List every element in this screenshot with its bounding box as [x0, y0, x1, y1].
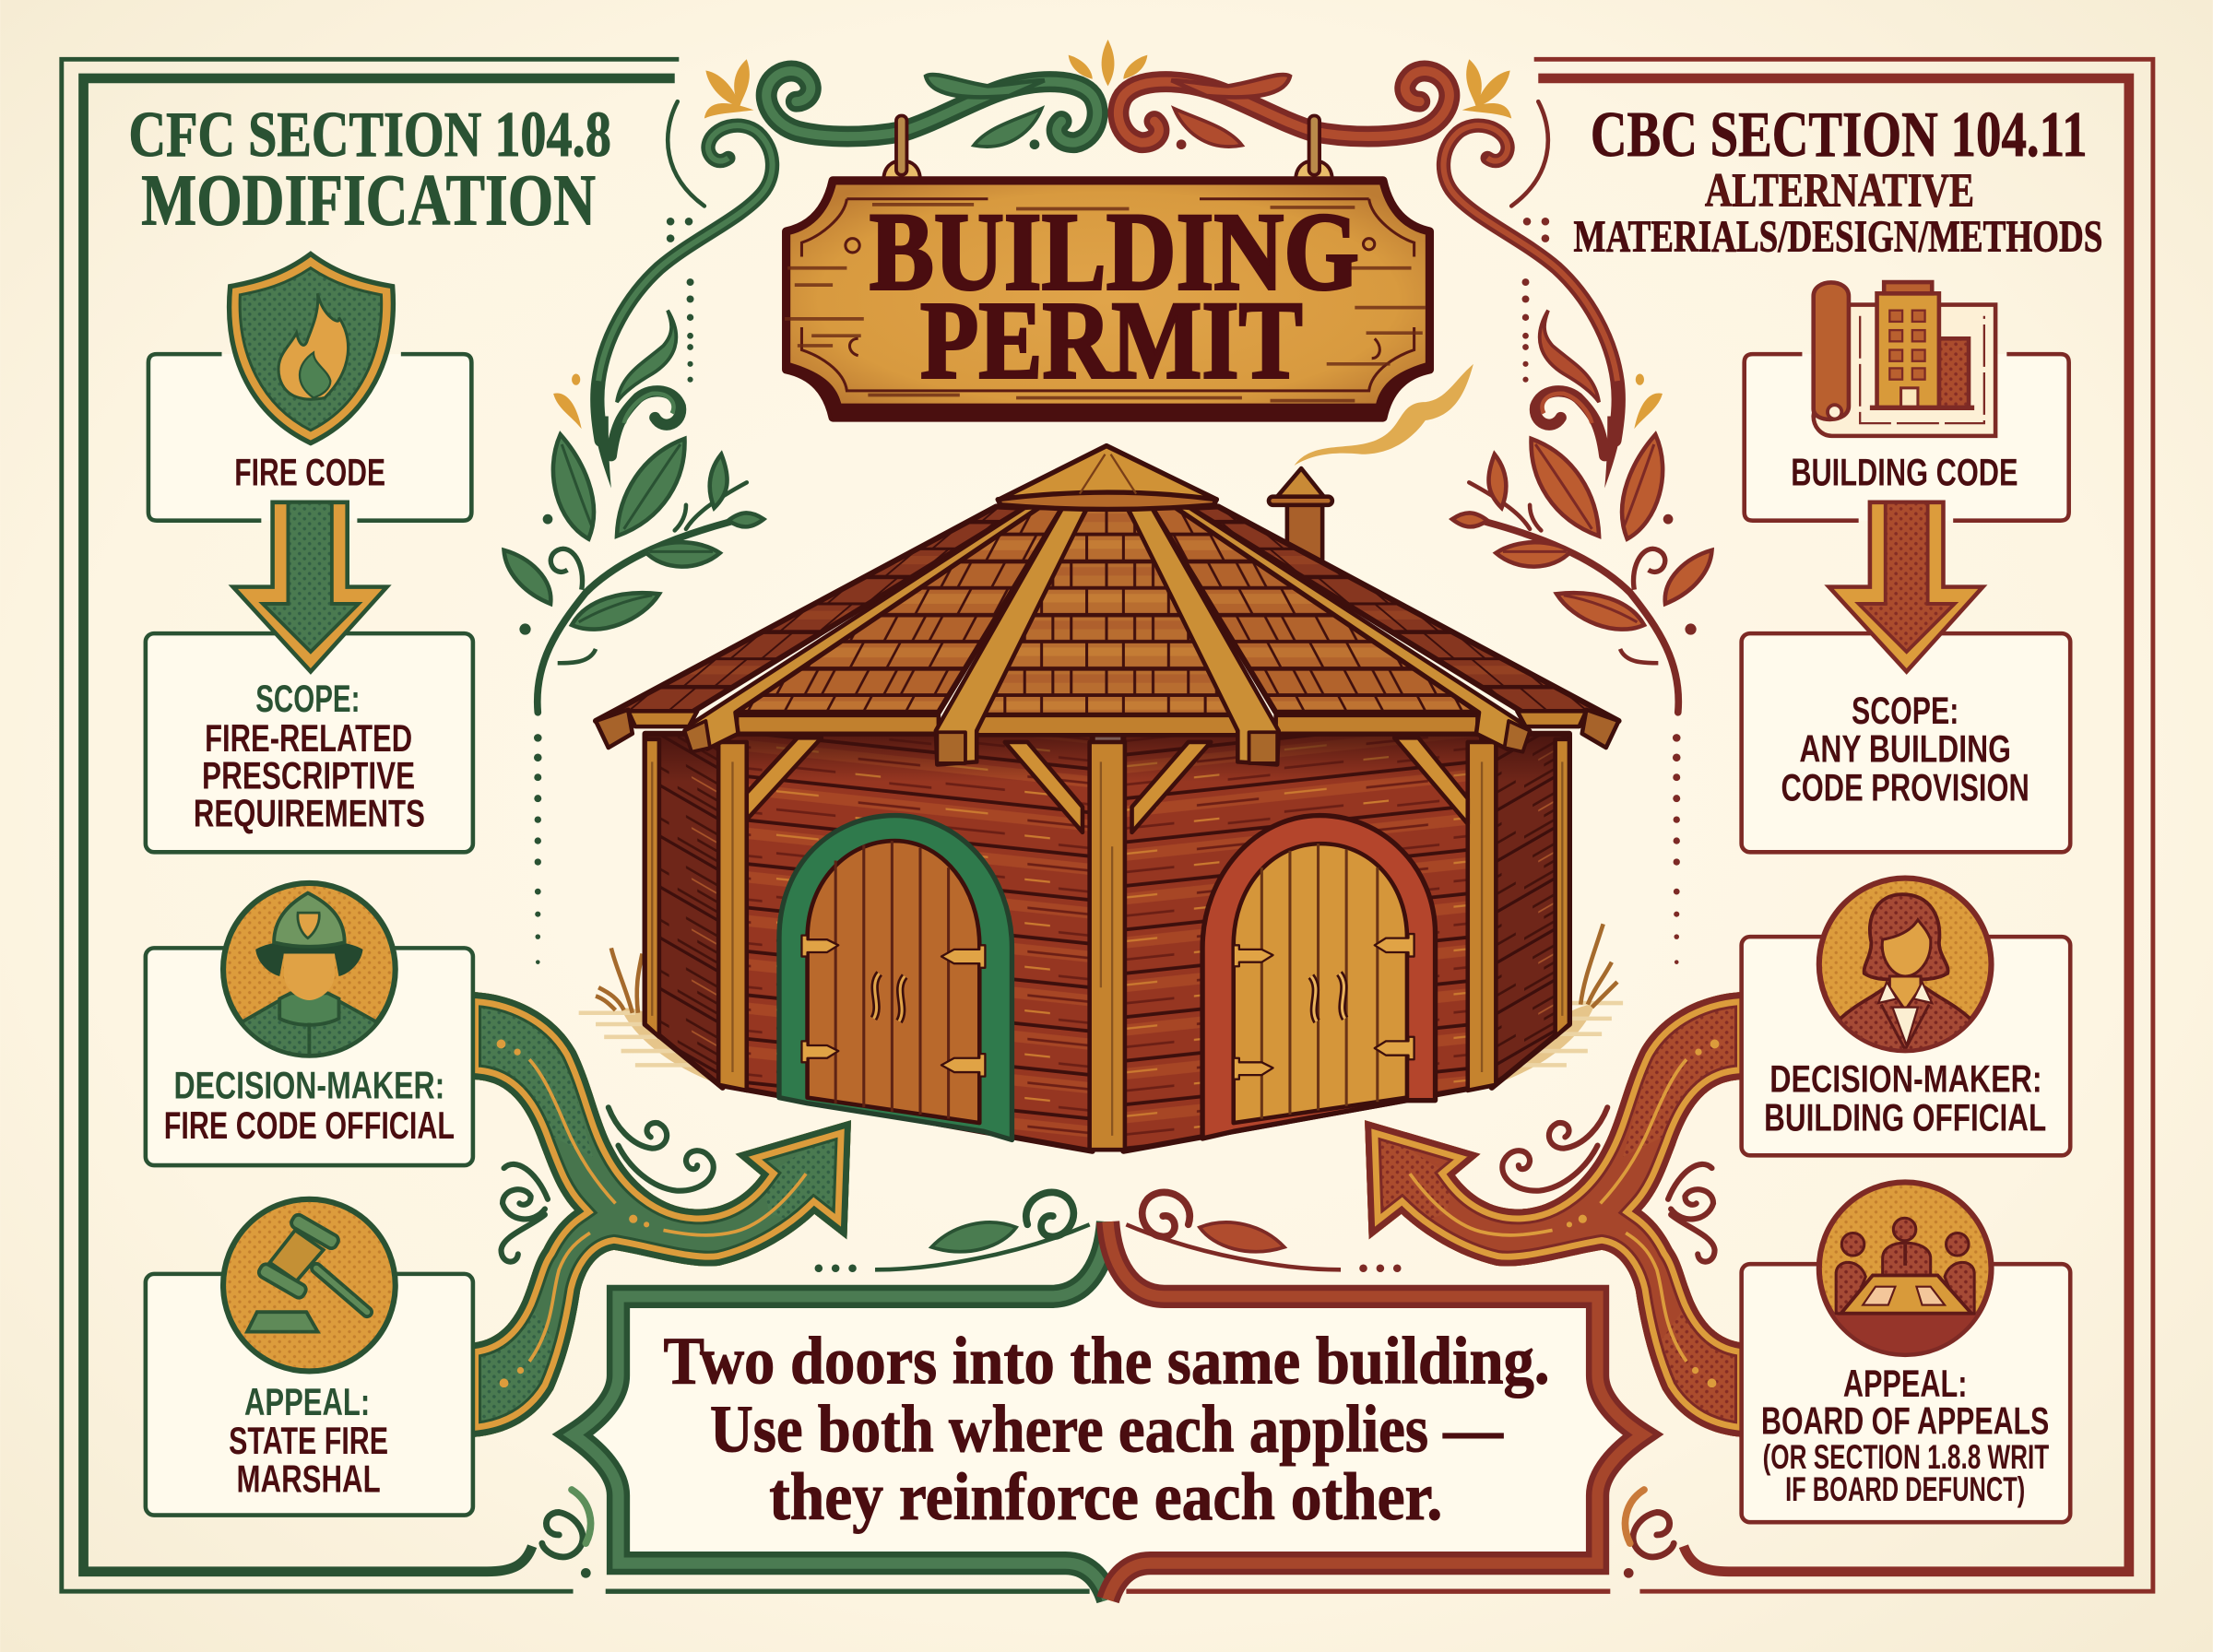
left heading [128, 99, 611, 241]
left box labels: DECISION-MAKER: [173, 1064, 444, 1106]
right box labels: SCOPE: [1852, 690, 1959, 732]
post grain [652, 761, 1562, 1136]
house [596, 446, 1619, 1151]
left box labels: STATE FIRE [229, 1420, 388, 1462]
front wall left [727, 734, 1093, 1151]
sign title [870, 191, 1359, 402]
green half of frame [574, 1221, 1108, 1599]
braces [747, 738, 1468, 832]
bottom curl left [542, 1490, 591, 1578]
left box labels: APPEAL: [244, 1381, 370, 1423]
left frame: green double border [62, 59, 1090, 1591]
rafter ends [684, 721, 1530, 763]
icon: fire shield [230, 254, 393, 443]
chimney [1269, 468, 1332, 563]
left heading: CFC SECTION 104.8 [128, 99, 611, 171]
left box labels: FIRE CODE OFFICIAL [164, 1104, 455, 1147]
building code box [1745, 354, 2069, 521]
red door [1202, 816, 1436, 1139]
decision-maker box [146, 948, 473, 1165]
callout text [663, 1323, 1550, 1534]
right vine with leaves [1443, 101, 1712, 713]
left box labels: PRESCRIPTIVE [202, 754, 415, 796]
right box labels: BOARD OF APPEALS [1761, 1400, 2049, 1443]
right boxes [1742, 354, 2070, 1522]
callout text: Use both where each applies — [710, 1392, 1504, 1467]
scope box [146, 633, 473, 852]
hanger straps [883, 115, 1332, 181]
left box labels: FIRE CODE [234, 451, 385, 493]
icon: woman official [1819, 879, 1992, 1072]
posts [645, 739, 1569, 1150]
roof cap [998, 446, 1216, 509]
rafters [684, 505, 1530, 764]
icon: firefighter [223, 883, 396, 1072]
left box labels: SCOPE: [255, 678, 360, 720]
green door [779, 816, 1012, 1139]
bottom curl right [1624, 1490, 1674, 1578]
appeal box [146, 1274, 473, 1516]
right box labels: DECISION-MAKER: [1769, 1057, 2042, 1100]
left arrow: merges decision-maker and appeal to green door [466, 992, 851, 1437]
right box labels [1761, 451, 2050, 1508]
icon: blueprint and building [1814, 282, 1995, 436]
callout top ornaments: green [815, 1192, 1090, 1272]
sign title: PERMIT [920, 278, 1303, 402]
right box labels: BUILDING OFFICIAL [1764, 1097, 2046, 1139]
right box labels: (OR SECTION 1.8.8 WRIT [1763, 1438, 2050, 1476]
callout text: they reinforce each other. [769, 1459, 1442, 1534]
right box labels: APPEAL: [1843, 1363, 1967, 1405]
down arrow green [233, 502, 387, 671]
flourishes near green arrow [501, 1107, 714, 1262]
icon: gavel [223, 1199, 396, 1371]
left box labels: REQUIREMENTS [194, 793, 425, 835]
callout text: Two doors into the same building. [663, 1323, 1550, 1398]
right box labels: ANY BUILDING [1799, 727, 2011, 770]
red half of frame [1108, 1221, 1643, 1599]
down arrow red [1829, 502, 1982, 671]
left box labels [164, 451, 455, 1500]
top ornament: green scroll [766, 71, 1097, 149]
callout top ornaments: red [1126, 1192, 1402, 1272]
callout interior [574, 1230, 1643, 1594]
right heading: ALTERNATIVE [1705, 164, 1974, 217]
wood grain and inner lines [785, 199, 1426, 401]
ground and grass [579, 924, 1623, 1083]
callout frame [574, 1221, 1643, 1599]
right heading: CBC SECTION 104.11 [1591, 99, 2088, 171]
right box labels: CODE PROVISION [1781, 766, 2030, 808]
icon: board of appeals [1814, 1182, 1997, 1359]
roof shingles [596, 505, 1619, 721]
chimney smoke [1295, 364, 1473, 466]
right arrow: merges decision-maker and appeal to red door [1365, 992, 1750, 1437]
side wall right [1492, 734, 1569, 1088]
appeal box [1742, 1264, 2070, 1522]
dotted lines [534, 218, 1681, 964]
left heading: MODIFICATION [141, 159, 596, 241]
right box labels: BUILDING CODE [1791, 451, 2018, 493]
left boxes [146, 354, 473, 1516]
fire code box [148, 354, 471, 521]
flourishes near red arrow [1502, 1107, 1715, 1262]
top ornament: red scroll [1118, 71, 1450, 149]
right frame: red double border [1126, 59, 2153, 1591]
eave beams [596, 710, 1619, 748]
left box labels: MARSHAL [237, 1457, 381, 1500]
decision-maker box [1742, 937, 2070, 1155]
scope box [1742, 633, 2070, 852]
right box labels: IF BOARD DEFUNCT) [1785, 1470, 2025, 1508]
wood board [787, 181, 1429, 418]
right heading [1574, 99, 2102, 261]
left box labels: FIRE-RELATED [205, 717, 412, 760]
wall shadow under eave [645, 734, 1569, 782]
gold fleurons [704, 40, 1511, 119]
sign title: BUILDING [870, 191, 1359, 314]
front wall right [1123, 734, 1482, 1151]
left vine with leaves [504, 101, 773, 713]
hanging sign [785, 115, 1431, 420]
side wall left [645, 734, 723, 1088]
